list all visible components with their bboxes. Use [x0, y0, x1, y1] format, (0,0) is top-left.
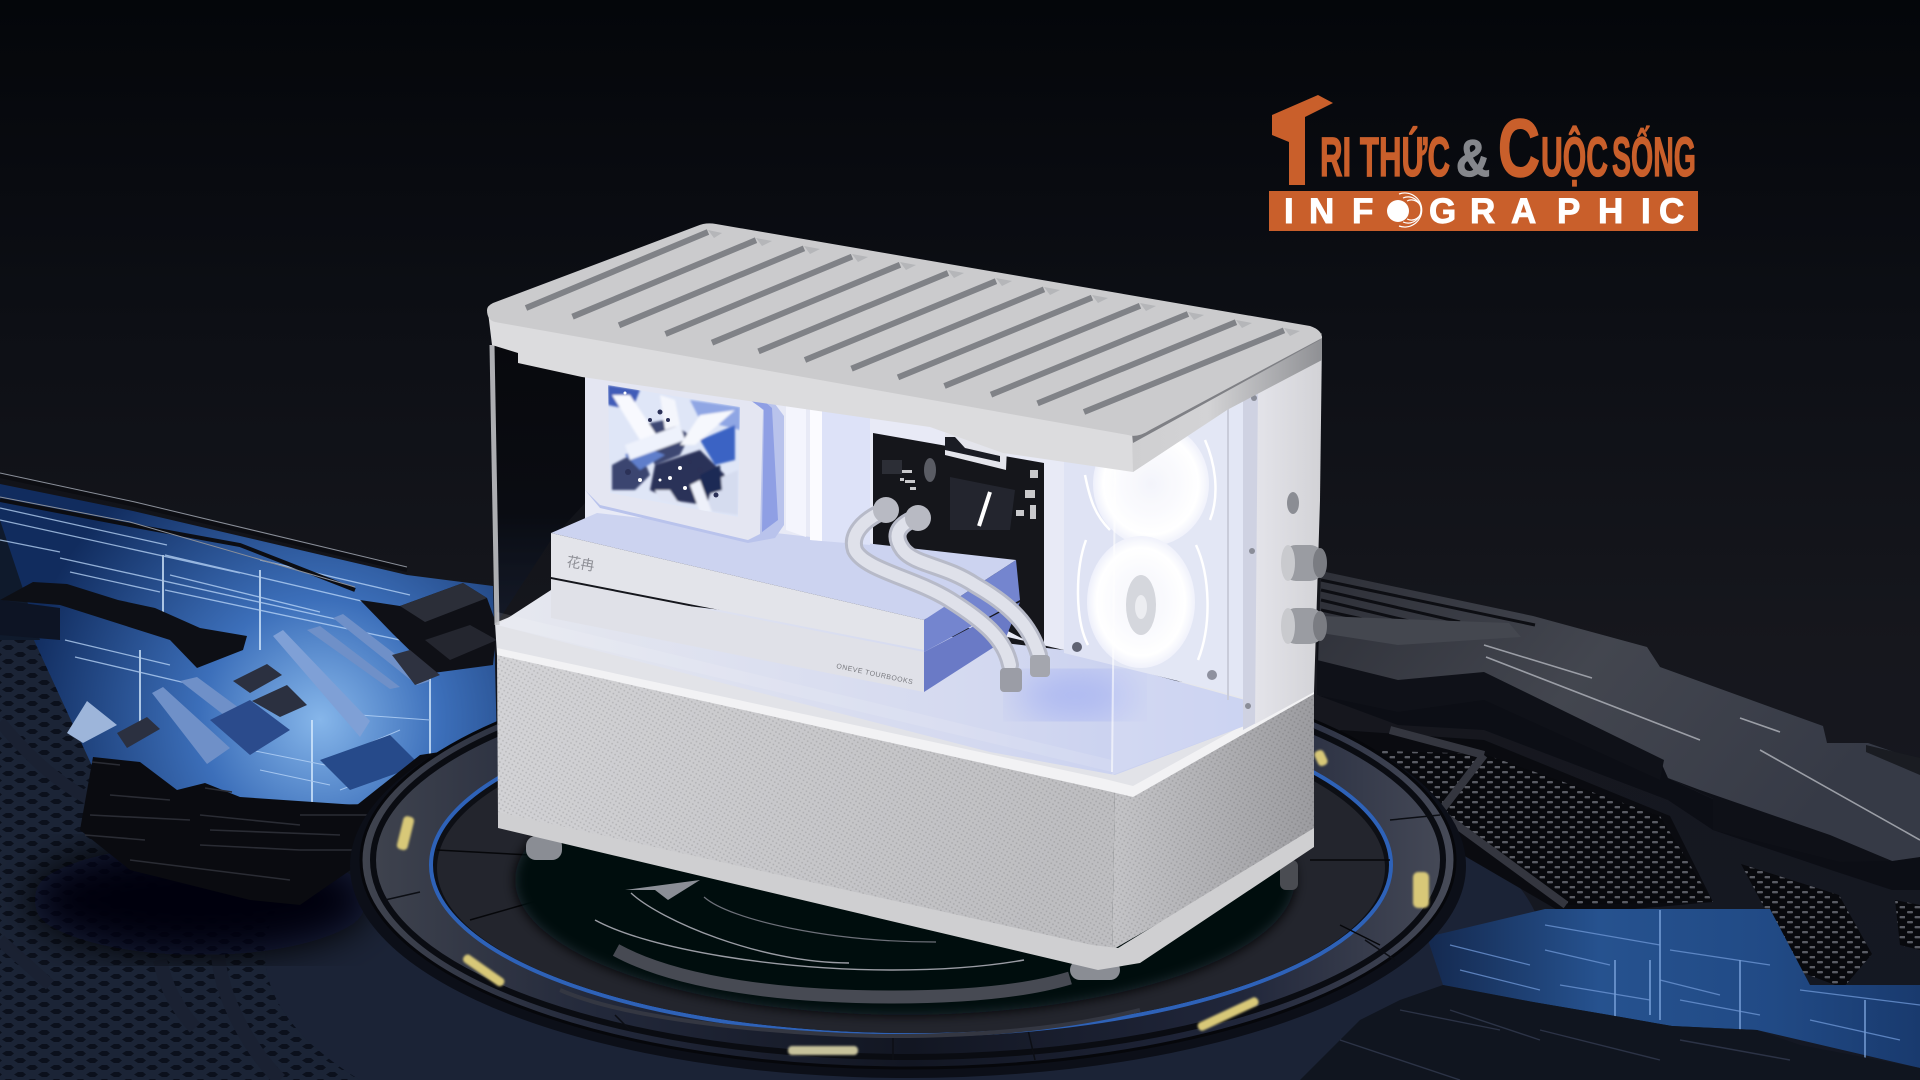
platform yellow lights — [396, 749, 1429, 1055]
top plate with vents — [487, 223, 1322, 436]
left rails and dark blocks — [0, 473, 497, 905]
left shadow — [30, 845, 370, 955]
glass panes — [492, 345, 1258, 775]
logo T mark — [1272, 95, 1333, 185]
platform shadow rim — [350, 654, 1466, 1078]
motherboard — [873, 433, 1044, 650]
model label: ONEVE TOURBOOKS — [836, 663, 914, 686]
vent slots — [526, 232, 1284, 412]
tube fittings — [873, 497, 1050, 692]
logo disc icon — [1385, 191, 1425, 229]
logo big C: C — [1498, 103, 1540, 194]
feet — [526, 836, 1298, 980]
radiator lower block — [551, 579, 1020, 692]
GPU panels — [786, 403, 870, 545]
PC case — [487, 223, 1327, 980]
radiator upper block — [551, 513, 1020, 652]
blue city light lines — [0, 508, 430, 802]
platform blue ring — [431, 695, 1391, 1035]
left hex floor — [0, 630, 560, 1080]
lower fan — [1087, 536, 1195, 668]
dark tops — [117, 664, 307, 748]
logo ampersand: & — [1456, 130, 1490, 188]
speaker base right face — [1112, 692, 1314, 950]
screen artwork — [608, 385, 740, 515]
control knob top — [1281, 545, 1327, 581]
display monitor — [585, 372, 784, 543]
logo infographic text: INFOGRAPHIC — [1284, 192, 1684, 231]
interior floor — [497, 590, 1255, 775]
right dark foreground blocks — [1300, 985, 1920, 1080]
upper fan — [1093, 436, 1209, 544]
logo second word: UỘC — [1541, 125, 1608, 188]
left floor curved bands — [0, 722, 280, 1080]
right hex mesh — [1340, 730, 1920, 988]
platform base disc — [265, 714, 1545, 1080]
right blue city — [1427, 909, 1920, 1068]
logo — [1269, 95, 1698, 231]
power button — [1287, 492, 1299, 514]
logo wordmark: RI THỨC — [1320, 125, 1450, 188]
logo infographic bar — [1269, 191, 1698, 231]
fan panel — [1064, 402, 1243, 700]
back wall — [585, 372, 1064, 650]
lid — [495, 600, 1314, 793]
right side panel — [1255, 340, 1327, 724]
platform inner disc — [437, 703, 1390, 1036]
brand mark: 花冉 — [565, 553, 596, 574]
left dark interior — [494, 345, 585, 623]
left blue glowing city — [0, 484, 497, 808]
right grey armour band — [1317, 571, 1920, 890]
control knob bottom — [1281, 608, 1327, 644]
speaker base left face — [497, 653, 1115, 962]
chrome lid strip — [497, 648, 1314, 797]
logo third word: SỐNG — [1612, 125, 1696, 188]
top plate front fascia — [488, 312, 1322, 472]
coolant tubes — [854, 497, 1050, 692]
light slabs — [67, 614, 430, 790]
platform outer ring — [361, 652, 1455, 1068]
base bottom trim — [498, 812, 1314, 970]
